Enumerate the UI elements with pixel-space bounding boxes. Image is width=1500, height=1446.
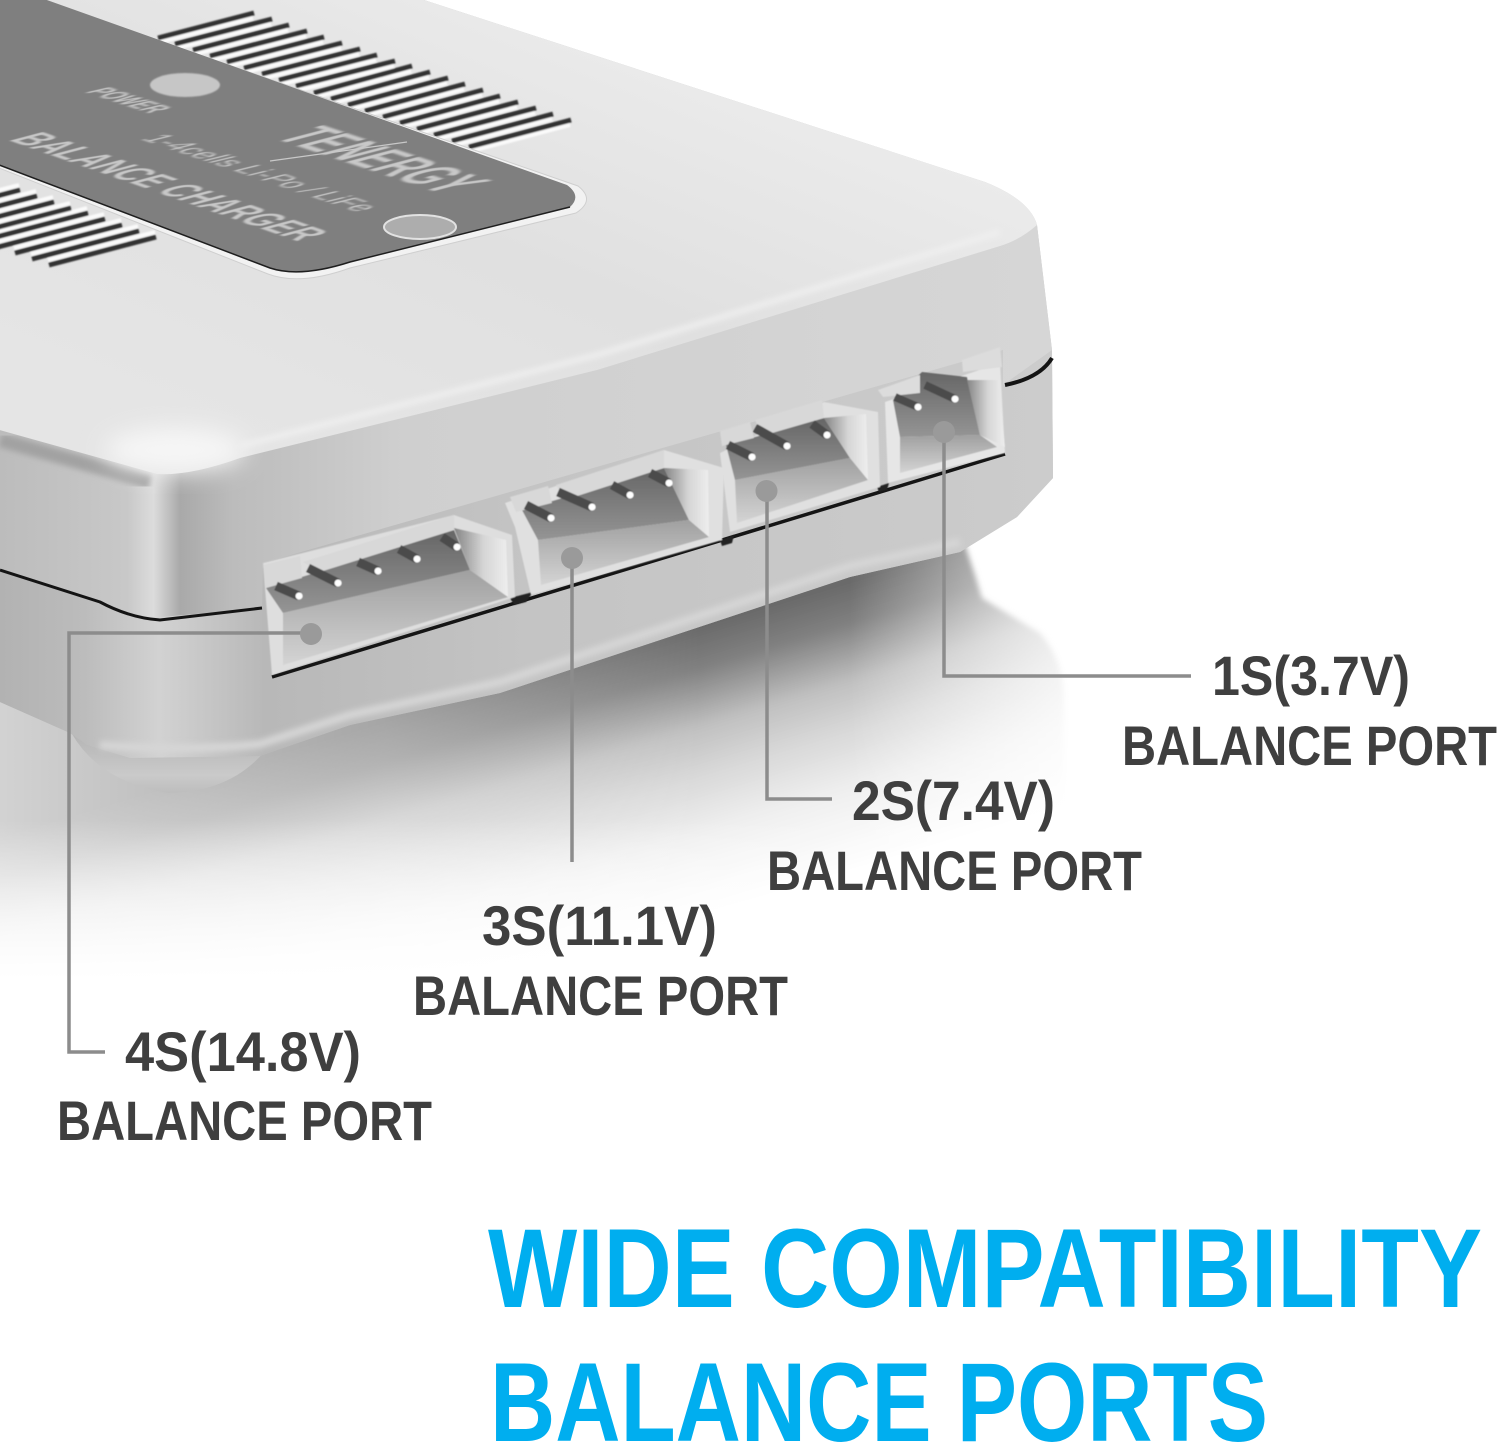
anchor dot xyxy=(561,547,583,569)
rubber foot xyxy=(72,734,264,793)
port bottom seam xyxy=(272,454,1005,677)
shadow under corner crease xyxy=(0,440,150,482)
port back wall xyxy=(522,468,689,540)
indicator light charge xyxy=(384,215,456,239)
callout 4S xyxy=(57,623,432,1152)
callout 3S xyxy=(413,547,788,1027)
port 4S xyxy=(263,515,533,675)
port side wall xyxy=(824,414,868,480)
plate rim xyxy=(0,0,587,279)
plate text cells: 1-4cells Li-Po / LiFe xyxy=(133,131,389,214)
lower shell xyxy=(0,358,1053,758)
port back wall xyxy=(726,418,850,480)
grille ridges xyxy=(0,185,155,260)
port floor xyxy=(538,520,709,585)
port side wall xyxy=(664,468,709,537)
indicator light power xyxy=(150,73,220,97)
port frame xyxy=(505,450,724,595)
lower edge highlight xyxy=(100,542,960,748)
pin tips xyxy=(752,435,827,457)
reflection below charger xyxy=(0,530,1080,1140)
port frame xyxy=(263,515,515,675)
logo rule xyxy=(270,142,407,161)
pin tips xyxy=(551,483,669,518)
port label: BALANCE PORT xyxy=(413,964,788,1027)
plate text brand: TENERGY xyxy=(257,121,507,198)
port back wall xyxy=(893,372,980,437)
top face xyxy=(0,0,1037,474)
pin tips xyxy=(918,399,955,407)
port label: BALANCE PORT xyxy=(57,1089,432,1152)
corner highlight xyxy=(105,428,245,472)
port floor xyxy=(283,570,508,665)
port ledges xyxy=(510,450,664,512)
case seam xyxy=(0,570,262,620)
port pins xyxy=(895,385,955,407)
anchor dot xyxy=(933,421,955,443)
plate text product: BALANCE CHARGER xyxy=(0,129,341,244)
port frame xyxy=(720,402,880,532)
port ledges xyxy=(878,347,1002,397)
plate face xyxy=(0,0,575,272)
pin tips xyxy=(299,547,457,596)
voltage label: 4S(14.8V) xyxy=(125,1020,361,1083)
body silhouette xyxy=(0,0,1053,758)
port side wall xyxy=(454,528,508,597)
plate text power: POWER xyxy=(77,85,180,115)
voltage label: 2S(7.4V) xyxy=(852,769,1055,832)
title xyxy=(488,1206,1482,1446)
port pins xyxy=(728,424,827,457)
right seam xyxy=(1005,358,1052,385)
charger body xyxy=(0,0,1053,793)
port ledges xyxy=(720,400,824,446)
port frame xyxy=(885,363,1005,483)
leader line xyxy=(69,633,311,1052)
leader line xyxy=(767,492,832,799)
front upper face xyxy=(0,225,1052,618)
gap to next port xyxy=(510,592,533,605)
vent grille lower xyxy=(0,185,156,265)
port floor xyxy=(900,435,997,473)
port ledges xyxy=(263,515,454,588)
label plate xyxy=(0,0,587,279)
port side wall xyxy=(967,380,1005,447)
port 2S xyxy=(720,400,889,532)
leader line xyxy=(944,432,1191,676)
port pins xyxy=(526,473,669,518)
voltage label: 1S(3.7V) xyxy=(1212,644,1410,707)
anchor dot xyxy=(756,480,778,502)
bevel highlight xyxy=(240,232,1000,446)
plate bottom dark edge xyxy=(0,163,570,272)
gap to next port xyxy=(877,483,889,492)
port floor xyxy=(735,458,868,523)
port pins xyxy=(276,537,457,596)
port back wall xyxy=(266,530,470,613)
gap to next port xyxy=(720,535,734,546)
port label: BALANCE PORT xyxy=(767,839,1142,902)
grille ridges xyxy=(157,18,570,152)
anchor dot xyxy=(300,623,322,645)
leader line xyxy=(570,558,574,862)
callout 1S xyxy=(933,421,1497,777)
grille slots xyxy=(158,13,571,147)
voltage label: 3S(11.1V) xyxy=(482,894,717,957)
port 3S xyxy=(505,450,734,595)
grille slots xyxy=(0,190,156,265)
callout 2S xyxy=(756,480,1142,902)
vent grille upper xyxy=(157,13,571,152)
port 1S xyxy=(878,347,1005,483)
